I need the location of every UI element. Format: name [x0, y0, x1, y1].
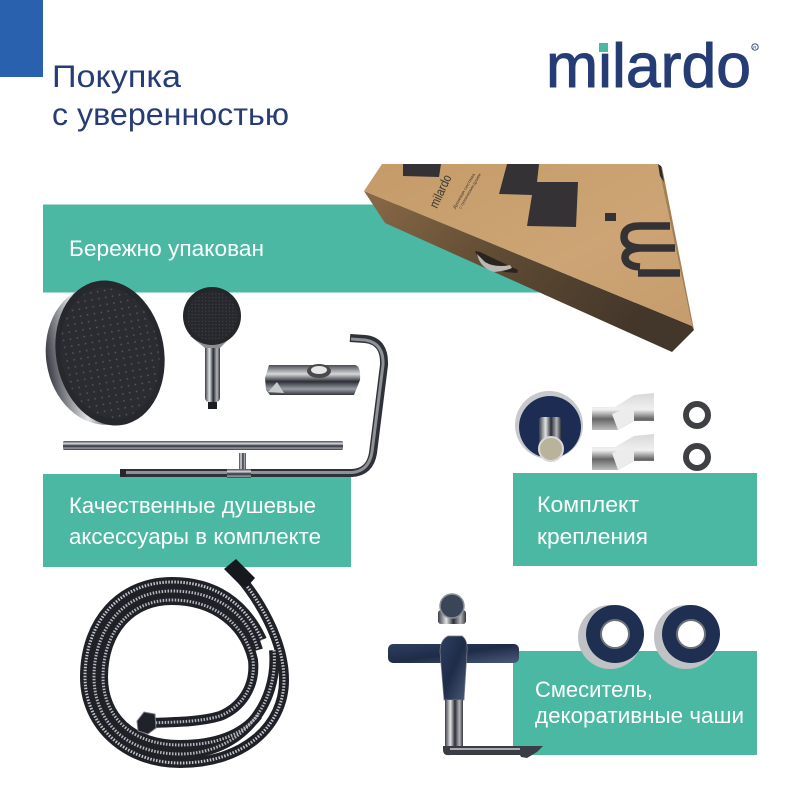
wall plate [515, 391, 583, 461]
lever body [440, 636, 467, 700]
crossbar [388, 644, 519, 663]
panel: carefully packed: Бережно упакован [69, 236, 264, 261]
title: Покупка [52, 58, 182, 94]
adapter fitting bottom [592, 434, 654, 470]
top dial [438, 610, 466, 624]
panel: accessories: Качественные душевые [69, 493, 316, 518]
faucet [388, 594, 543, 758]
panel: mixer and bowls [513, 651, 757, 755]
T stub on arm [239, 453, 246, 480]
cardboard box [364, 164, 694, 352]
title [52, 58, 289, 132]
adapter fitting top [592, 393, 654, 430]
rubber washer top [686, 404, 708, 426]
blue corner tab [0, 0, 43, 77]
spout [443, 746, 543, 758]
rubber washer bottom [686, 446, 708, 468]
rain shower head [37, 272, 176, 434]
logo: milardo: milardo [546, 32, 751, 101]
flexible hose [85, 559, 284, 763]
panel: mixer and bowls: Смеситель, [535, 677, 653, 702]
cardboard box: с тропическим душем [458, 172, 482, 210]
hand shower [183, 287, 241, 409]
panel: mounting set: Комплект [537, 492, 639, 517]
cardboard box: milardo [426, 172, 455, 210]
decorative bowl right [654, 605, 720, 669]
title: с уверенностью [52, 96, 289, 132]
shower accessories [37, 272, 360, 480]
cardboard box: Душевая система [452, 172, 476, 210]
panel: carefully packed [43, 204, 553, 292]
slider clamp [265, 364, 360, 395]
panel: mounting set: крепления [537, 524, 648, 549]
column [445, 700, 463, 746]
curved shower arm [120, 338, 384, 478]
panel: accessories: аксессуары в комплекте [69, 524, 321, 549]
panel: accessories [43, 474, 351, 567]
panel: mounting set [513, 473, 757, 566]
upper rod [63, 441, 343, 450]
panel: mixer and bowls: декоративные чаши [535, 703, 744, 728]
mounting set [515, 391, 708, 470]
decorative bowl left [578, 605, 644, 669]
logo: milardo: R [753, 45, 757, 50]
